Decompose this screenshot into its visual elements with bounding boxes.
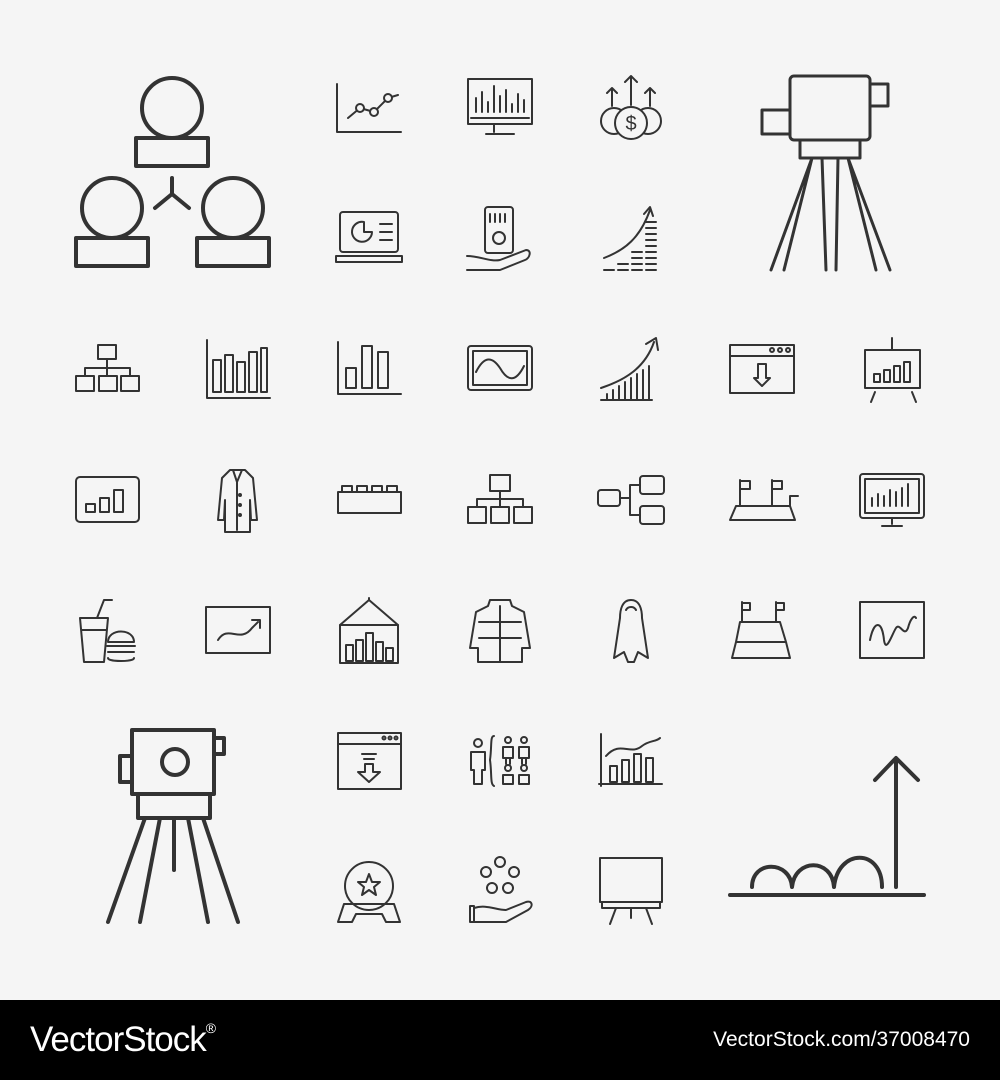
footer logo: VectorStock® [30, 1020, 215, 1059]
icon: flags podium [732, 602, 790, 658]
icon: raincoat [614, 600, 648, 662]
icon: hand molecule [470, 857, 532, 922]
icon: hanging sign bars [340, 598, 398, 663]
icon: mind map [598, 476, 664, 524]
icon: team group [471, 736, 529, 786]
icon: flags platform [730, 480, 798, 520]
icon: video camera tripod [762, 76, 890, 270]
icon: growth arrow bars [604, 207, 656, 270]
icon: monitor bars [468, 79, 532, 134]
icon: whiteboard easel [600, 858, 662, 924]
icon: frame squiggle [860, 602, 924, 658]
icon: hierarchy [76, 345, 139, 391]
icon: monitor bar chart [860, 474, 924, 526]
footer bar [0, 1000, 1000, 1080]
icon: bar chart [338, 342, 401, 394]
footer url: VectorStock.com/37008470 [713, 1028, 970, 1051]
icon: surveyor tripod [108, 730, 238, 922]
icon: people network [76, 78, 269, 266]
icon: drink burger [80, 600, 135, 662]
icon: wave screen [468, 346, 532, 390]
icon: puffer jacket [470, 600, 530, 662]
icon: signal bars box [76, 477, 139, 522]
icon: browser download 2 [338, 733, 401, 789]
icon: hand phone [467, 207, 530, 270]
icon: line chart [337, 84, 401, 132]
icon: money growth [601, 76, 661, 139]
icon: growth curve arrow [601, 338, 658, 400]
icon: frame trend [206, 607, 270, 653]
icon: easel chart [865, 338, 920, 402]
icon: coat [218, 470, 257, 532]
icon: jumping arrow [730, 758, 924, 895]
icon: lego brick [338, 486, 401, 513]
icon: browser download [730, 345, 794, 393]
icon: bar chart thin [207, 340, 270, 398]
icon: laptop pie [336, 212, 402, 262]
icon: hierarchy tree [468, 475, 532, 523]
icon: area chart [599, 734, 662, 786]
icon: star badge [338, 862, 400, 922]
icon: money growth: $ [625, 113, 637, 135]
